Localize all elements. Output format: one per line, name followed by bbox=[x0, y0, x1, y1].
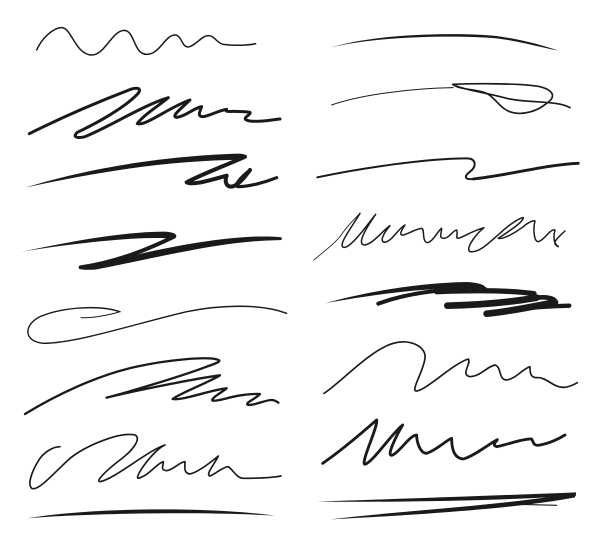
stroke: right 8, double tapered underline bbox=[317, 492, 576, 519]
stroke: right 3, line with S-bend bbox=[317, 158, 578, 179]
stroke: right 2, line with loop bbox=[332, 84, 570, 113]
stroke: right 7, bold zigzag scribble bbox=[323, 420, 565, 464]
stroke: right 5, heavy marker scribble bbox=[325, 282, 569, 314]
stroke: left 1, thin wave bbox=[37, 28, 256, 55]
stroke: left 2, zigzag scribble bbox=[29, 88, 280, 137]
stroke: left 7, looping signature bbox=[30, 434, 281, 489]
stroke: left 6, sharp zigzag bbox=[25, 358, 278, 414]
stroke: left 8, long tapered underline bbox=[27, 509, 275, 518]
stroke: left 4, bold Z-shaped line bbox=[21, 232, 282, 270]
stroke: left 3, tapered line with zigzag end bbox=[25, 154, 277, 188]
stroke: right 4, thin cursive scribble bbox=[314, 213, 565, 260]
stroke: right 1, arched line bbox=[331, 34, 558, 51]
stroke: left 5, thin loop line bbox=[28, 306, 287, 343]
stroke: right 6, wave with peak bbox=[324, 342, 577, 393]
